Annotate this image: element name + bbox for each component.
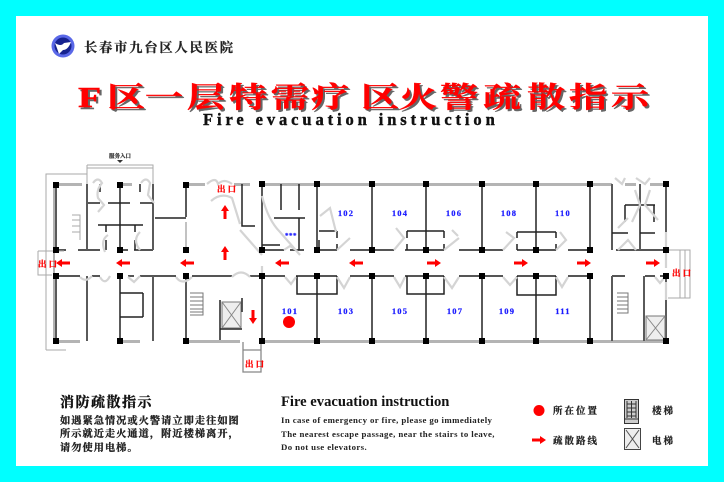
chinese instruction text: 请勿使用电梯。 (60, 441, 139, 454)
english instruction text (281, 415, 495, 452)
title chinese: F区一层特需疗区火警疏散指示 (78, 81, 652, 114)
chinese instruction heading: 消防疏散指示 (60, 394, 153, 411)
exit labels: 出 口 (217, 184, 236, 194)
legend: current position: 所在位置 (553, 405, 599, 417)
right exit stairs (668, 250, 690, 298)
legend: current position (534, 405, 599, 417)
room numbers: 109 (499, 306, 515, 316)
chinese instruction text: 所示就近走火通道，附近楼梯离开， (60, 427, 240, 440)
hospital logo (52, 34, 74, 58)
title english: Fire evacuation instruction (203, 110, 499, 129)
room numbers: 107 (447, 306, 463, 316)
exit labels: 出 口 (38, 259, 57, 269)
room alcoves lower (297, 276, 556, 295)
columns (53, 181, 669, 344)
room numbers: 102 (338, 208, 354, 218)
legend: stairs (624, 400, 675, 424)
door swings (80, 178, 666, 300)
room numbers: 104 (392, 208, 408, 218)
legend: evacuation route: 疏散路线 (553, 435, 599, 447)
room numbers: 111 (555, 306, 571, 316)
legend: elevator (624, 428, 675, 450)
legend: elevator: 电梯 (652, 435, 675, 447)
outer and corridor walls (54, 184, 668, 342)
room numbers: 106 (446, 208, 462, 218)
bottom exit stairs (243, 342, 261, 372)
room numbers (282, 208, 571, 316)
room numbers: 101 (282, 306, 298, 316)
top annex entrance (46, 152, 153, 350)
hospital name: 长春市九台区人民医院 (84, 39, 235, 55)
elevator (222, 302, 665, 340)
evacuation arrows (56, 205, 660, 324)
current position marker (283, 316, 295, 328)
english instruction text: Do not use elevators. (281, 442, 367, 452)
english instruction heading: Fire evacuation instruction (281, 394, 449, 410)
chinese instruction text: 如遇紧急情况或火警请立即走往如图 (60, 414, 240, 427)
exit labels (38, 184, 691, 369)
legend (532, 400, 675, 450)
room numbers: *** (285, 232, 297, 240)
room numbers: 103 (338, 306, 354, 316)
room numbers: 105 (392, 306, 408, 316)
legend: evacuation route (532, 435, 599, 447)
stair wells (190, 293, 628, 315)
room numbers: 108 (501, 208, 517, 218)
legend: stairs: 楼梯 (652, 405, 675, 417)
title chinese: F区一层特需疗区火警疏散指示 (80, 83, 654, 116)
english instruction text: The nearest escape passage, near the stairs to leave, (281, 429, 495, 439)
room alcoves upper (319, 205, 655, 250)
room numbers: 110 (555, 208, 571, 218)
chinese instruction text (60, 414, 240, 454)
left stair and exit (38, 215, 80, 275)
floor plan (38, 152, 691, 372)
english instruction text: In case of emergency or fire, please go immediately (281, 415, 493, 425)
exit labels: 出 口 (245, 359, 264, 369)
top annex entrance: 服务入口 (109, 152, 131, 160)
exit labels: 出 口 (672, 268, 691, 278)
